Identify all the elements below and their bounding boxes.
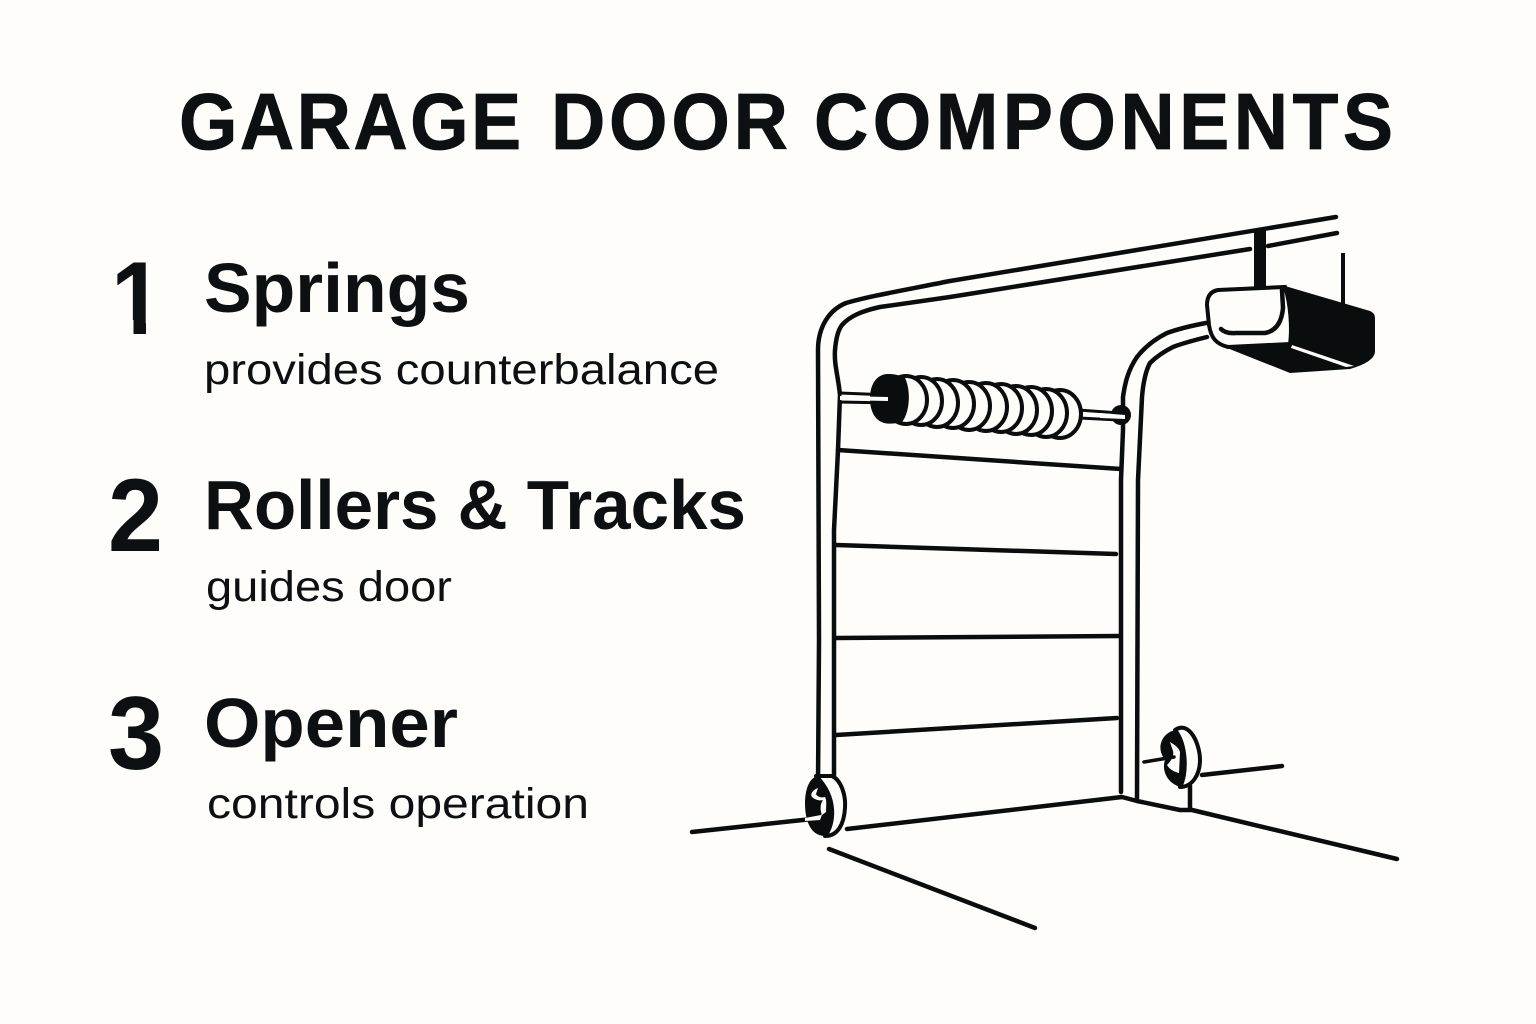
floor lines [692, 766, 1397, 928]
item 1: springs: Springs [204, 249, 470, 327]
item 2: rollers and tracks: guides door [206, 563, 452, 611]
item 1: springs [117, 262, 717, 393]
item 1: springs: provides counterbalance [204, 346, 719, 394]
title: DOOR [551, 78, 788, 167]
item 1: springs: 1 [111, 239, 163, 356]
housing detail [1221, 290, 1283, 333]
item 2: rollers and tracks: 2 [108, 458, 163, 574]
door panel lines [836, 450, 1121, 735]
body highlight [1291, 345, 1354, 367]
mount stem [1254, 230, 1266, 292]
housing [1207, 287, 1291, 347]
garage door illustration [692, 217, 1397, 928]
opener unit [1207, 230, 1375, 373]
spring end cap [870, 374, 909, 424]
title: COMPONENTS [814, 78, 1393, 167]
item 2: rollers and tracks [108, 458, 746, 611]
right roller [1144, 728, 1200, 787]
title: GARAGE [179, 78, 521, 167]
left roller [805, 776, 845, 836]
antenna [1341, 253, 1345, 307]
item 3: opener: 3 [108, 675, 164, 791]
spring assembly [840, 374, 1131, 438]
item 3: opener: Opener [204, 684, 458, 762]
spring coils [885, 376, 1081, 438]
item 3: opener: controls operation [207, 780, 589, 828]
right rod [1078, 410, 1120, 420]
component list [108, 239, 746, 828]
item 3: opener [108, 675, 589, 828]
item 2: rollers and tracks: Rollers & Tracks [204, 466, 746, 544]
right knob [1111, 405, 1131, 425]
left rod [840, 393, 890, 403]
motor body [1222, 286, 1375, 373]
title [179, 78, 1393, 167]
left track and ceiling rail [818, 217, 1337, 785]
right track [1121, 323, 1207, 798]
